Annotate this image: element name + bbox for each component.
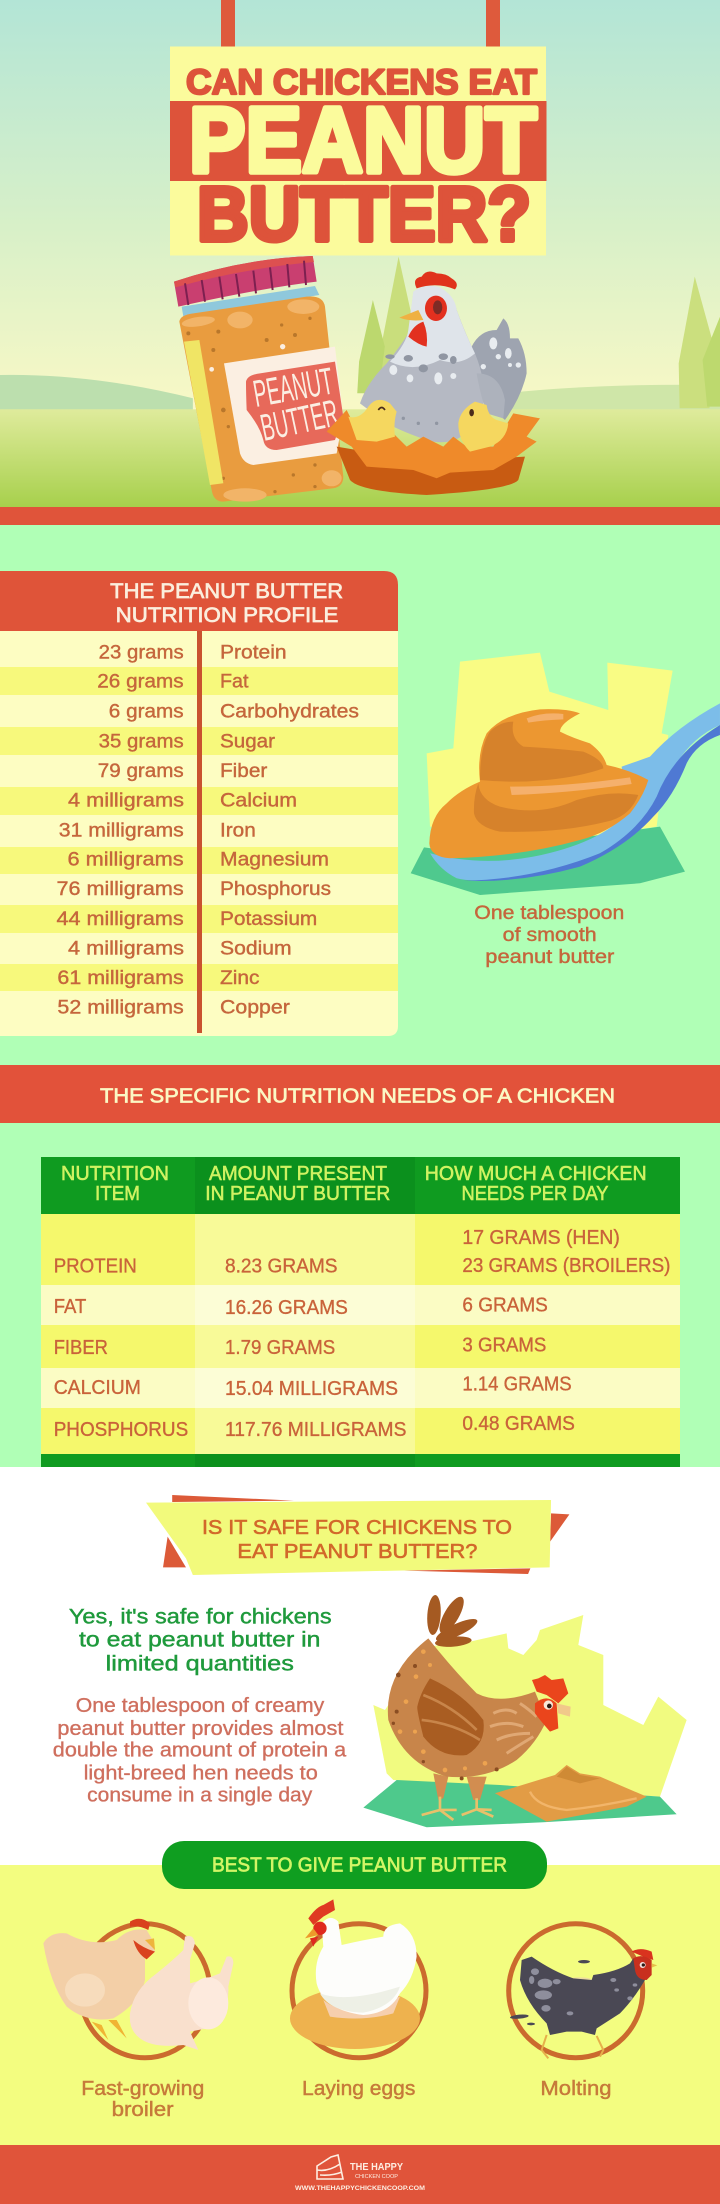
amounts column: 4 milligrams — [68, 938, 184, 960]
nutrients column: Sugar — [220, 731, 276, 752]
spoon caption: peanut butter — [485, 947, 615, 968]
nutrients column: Sodium — [220, 938, 292, 960]
amounts column: 26 grams — [97, 672, 184, 693]
banner: is it safe: IS IT SAFE FOR CHICKENS TO — [202, 1516, 512, 1539]
table rows: PHOSPHORUS — [54, 1419, 188, 1441]
table rows: 6 GRAMS — [462, 1295, 548, 1317]
table rows: FAT — [54, 1296, 86, 1318]
table rows: 117.76 MILLIGRAMS — [225, 1419, 406, 1441]
illustration: hen on nest — [327, 271, 540, 495]
table rows: 15.04 MILLIGRAMS — [225, 1378, 398, 1400]
table header: IN PEANUT BUTTER — [205, 1183, 390, 1205]
panel: nutrition profile — [0, 571, 398, 1036]
section heading band: THE SPECIFIC NUTRITION NEEDS OF A CHICKEN — [100, 1084, 615, 1107]
table rows: 1.79 GRAMS — [225, 1337, 335, 1359]
green statement — [69, 1605, 332, 1676]
amounts column: 23 grams — [99, 642, 184, 663]
explanation text — [53, 1695, 347, 1807]
jar label text: PEANUT — [250, 361, 336, 416]
amounts column: 61 milligrams — [57, 968, 184, 989]
nest — [327, 410, 540, 495]
spoon caption — [474, 903, 624, 968]
tail feathers — [426, 1593, 480, 1648]
illustration: spoon of peanut butter — [411, 653, 720, 895]
explanation text: One tablespoon of creamy — [76, 1695, 324, 1717]
jar label — [224, 347, 343, 465]
section background: safety — [0, 1467, 720, 1865]
banner: is it safe: EAT PEANUT BUTTER? — [237, 1540, 477, 1563]
red stripe under hero — [0, 507, 720, 525]
table: chicken nutrition needs — [41, 1157, 680, 1467]
spoon caption: of smooth — [503, 925, 597, 946]
amounts column: 52 milligrams — [57, 997, 184, 1018]
amounts column — [56, 642, 184, 1018]
icon: fast-growing broiler — [43, 1919, 233, 2058]
section background: chicken needs — [0, 1123, 720, 1467]
jar lid — [174, 256, 317, 307]
amounts column: 4 milligrams — [68, 791, 184, 812]
peanut butter puddle — [495, 1765, 647, 1822]
table rows — [54, 1227, 670, 1441]
amounts column: 6 grams — [109, 701, 184, 722]
table rows: 23 GRAMS (BROILERS) — [462, 1255, 670, 1277]
section heading band — [0, 1065, 720, 1123]
nutrients column: Phosphorus — [220, 879, 331, 900]
table rows: PROTEIN — [54, 1256, 137, 1278]
table rows: 1.14 GRAMS — [462, 1374, 572, 1396]
banner: is it safe — [146, 1495, 569, 1575]
green statement: to eat peanut butter in — [79, 1629, 320, 1652]
green statement: Yes, it's safe for chickens — [69, 1605, 332, 1628]
amounts column: 76 milligrams — [56, 879, 184, 900]
nutrients column — [220, 642, 359, 1018]
icon: molting — [509, 1924, 657, 2058]
explanation text: double the amount of protein a — [53, 1740, 347, 1762]
amounts column: 44 milligrams — [56, 909, 184, 930]
best-to-give labels: broiler — [112, 2099, 174, 2121]
nutrients column: Zinc — [220, 968, 260, 989]
illustration: peanut butter jar — [174, 256, 343, 502]
table rows: 0.48 GRAMS — [462, 1413, 575, 1435]
table header: NEEDS PER DAY — [462, 1183, 608, 1205]
table header: AMOUNT PRESENT — [209, 1163, 387, 1185]
best-to-give labels: Laying eggs — [302, 2078, 415, 2100]
logo text: THE HAPPY — [350, 2162, 403, 2173]
nutrients column: Carbohydrates — [220, 701, 359, 722]
nutrients column: Fiber — [220, 761, 268, 782]
amounts column: 6 milligrams — [68, 850, 184, 871]
table rows: 3 GRAMS — [462, 1335, 546, 1357]
table rows: FIBER — [54, 1337, 108, 1359]
explanation text: consume in a single day — [87, 1785, 312, 1807]
hero section background — [0, 0, 720, 525]
nutrients column: Calcium — [220, 791, 297, 812]
section background: best to give — [0, 1865, 720, 2145]
best-to-give labels: Fast-growing — [81, 2078, 204, 2100]
title line 3: BUTTER? — [197, 172, 531, 258]
best-to-give labels: Molting — [540, 2078, 612, 2100]
table rows: 16.26 GRAMS — [225, 1297, 348, 1319]
chicks — [348, 400, 508, 452]
green statement: limited quantities — [106, 1653, 294, 1676]
nutrients column: Potassium — [220, 909, 317, 930]
amounts column: 79 grams — [98, 761, 184, 782]
nutrients column: Copper — [220, 997, 291, 1018]
nutrients column: Magnesium — [220, 850, 329, 871]
logo text: CHICKEN COOP — [355, 2174, 399, 2180]
logo text — [295, 2162, 425, 2192]
jar label text: BUTTER — [257, 393, 342, 450]
pill heading: BEST TO GIVE PEANUT BUTTER — [212, 1855, 507, 1877]
panel header: NUTRITION PROFILE — [116, 604, 338, 627]
nutrients column: Iron — [220, 820, 256, 841]
title line 2: PEANUT — [189, 88, 537, 192]
table rows: 8.23 GRAMS — [225, 1256, 338, 1278]
best-to-give labels — [81, 2078, 612, 2121]
title sign — [170, 0, 546, 258]
explanation text: light-breed hen needs to — [84, 1762, 318, 1784]
icon: logo mark — [317, 2155, 343, 2179]
nutrients column: Fat — [220, 672, 249, 693]
table header: ITEM — [95, 1183, 140, 1205]
jar label text — [250, 361, 342, 450]
panel header: THE PEANUT BUTTER — [110, 580, 343, 603]
section background: nutrition — [0, 525, 720, 1065]
icon: laying eggs — [290, 1899, 426, 2058]
title line 1: CAN CHICKENS EAT — [186, 63, 537, 102]
table header — [41, 1157, 680, 1214]
amounts column: 31 milligrams — [59, 820, 184, 841]
panel header — [0, 571, 398, 631]
illustration: hen pecking peanut butter — [363, 1593, 687, 1827]
table header: HOW MUCH A CHICKEN — [425, 1163, 647, 1185]
explanation text: peanut butter provides almost — [57, 1718, 344, 1740]
logo text: WWW.THEHAPPYCHICKENCOOP.COM — [295, 2185, 425, 2192]
table rows: CALCIUM — [54, 1377, 141, 1399]
table rows: 17 GRAMS (HEN) — [462, 1227, 620, 1249]
amounts column: 35 grams — [99, 731, 184, 752]
nutrients column: Protein — [220, 642, 287, 663]
table header: NUTRITION — [61, 1163, 169, 1185]
footer — [0, 2145, 720, 2204]
pill heading — [162, 1841, 547, 1889]
spoon caption: One tablespoon — [474, 903, 624, 924]
